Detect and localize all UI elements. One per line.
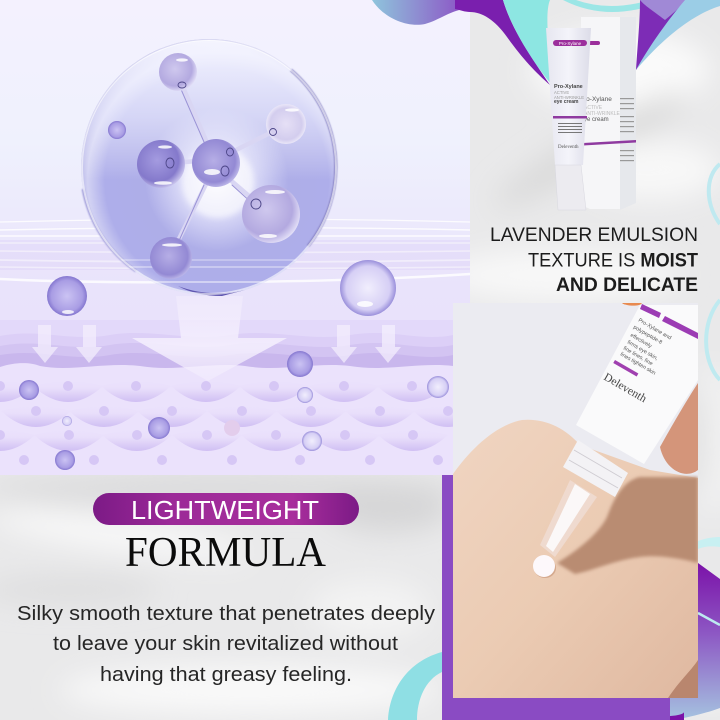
product: tube and box: ACTIVE <box>554 90 569 95</box>
photo: applying cream <box>453 303 698 698</box>
product: tube and box: ANTI-WRINKLE <box>584 111 620 117</box>
product: tube and box: Pro-Xylane <box>559 41 582 46</box>
label: lightweight pill: LIGHTWEIGHT <box>131 495 319 525</box>
purple backing block <box>442 475 670 720</box>
cream drop <box>535 563 556 578</box>
description text: to leave your skin revitalized without <box>53 633 398 655</box>
dots <box>0 381 453 465</box>
skin <box>453 420 698 698</box>
label: lightweight pill <box>93 493 359 525</box>
joints <box>166 82 276 209</box>
product: tube and box: ye cream <box>584 117 609 123</box>
photo: applying cream: Deleventh <box>602 371 649 405</box>
text: lavender emulsion <box>490 224 698 296</box>
product: tube and box <box>546 17 636 210</box>
sphere lower ripple lines <box>120 259 297 283</box>
light burst <box>182 146 254 218</box>
tube <box>546 28 591 165</box>
description text: having that greasy feeling. <box>100 664 352 686</box>
product: tube and box: Pro-Xylane <box>554 84 583 90</box>
ripple rings <box>0 219 470 282</box>
tube body <box>576 305 698 464</box>
hand fold <box>668 660 698 698</box>
collar <box>563 440 628 497</box>
tube print <box>619 318 672 377</box>
scallops <box>0 390 453 451</box>
tube print: polypeptide-8 <box>632 325 663 346</box>
bottom-left teal arc <box>388 652 442 720</box>
product: tube and box: ro-Xylane <box>584 96 612 103</box>
text: lavender emulsion: AND DELICATE <box>556 274 698 296</box>
atoms <box>108 53 306 279</box>
sphere rim <box>291 70 336 246</box>
finger <box>660 383 698 474</box>
bottom-right purple swirl <box>669 537 720 720</box>
icon: molecule sphere <box>80 39 340 296</box>
product: tube and box: ACTIVE <box>584 105 603 111</box>
top-right swirl shapes <box>455 0 720 85</box>
product: tube and box: ANTI-WRINKLE <box>554 95 584 100</box>
box <box>581 17 620 209</box>
heading: formula: FORMULA <box>125 530 327 576</box>
tube print: effectively <box>629 333 653 350</box>
text: lavender emulsion: TEXTURE IS MOIST <box>528 250 698 272</box>
description text <box>17 603 435 686</box>
text: lavender emulsion: LAVENDER EMULSION <box>490 224 698 246</box>
big down arrow <box>132 316 286 372</box>
product: tube and box: Deleventh <box>558 145 579 150</box>
molecule bonds <box>177 90 270 240</box>
description text: Silky smooth texture that penetrates deeply <box>17 603 435 625</box>
panel: molecule hero <box>0 0 483 475</box>
highlights <box>154 58 299 247</box>
icons: floating bubbles <box>19 260 449 470</box>
product: tube and box: eye cream <box>554 99 579 105</box>
skin layers <box>0 320 453 368</box>
tube print: lines tighten skin <box>619 352 657 377</box>
tube print: fine lines, fine <box>622 346 654 367</box>
small down arrows <box>32 325 401 363</box>
right edge teal rings <box>709 164 720 224</box>
tube print: Pro-Xylane and <box>637 318 672 341</box>
top blob <box>372 0 459 25</box>
nozzle <box>540 480 597 557</box>
shadow <box>557 477 698 574</box>
tube print: firms eye skin, <box>626 340 659 362</box>
